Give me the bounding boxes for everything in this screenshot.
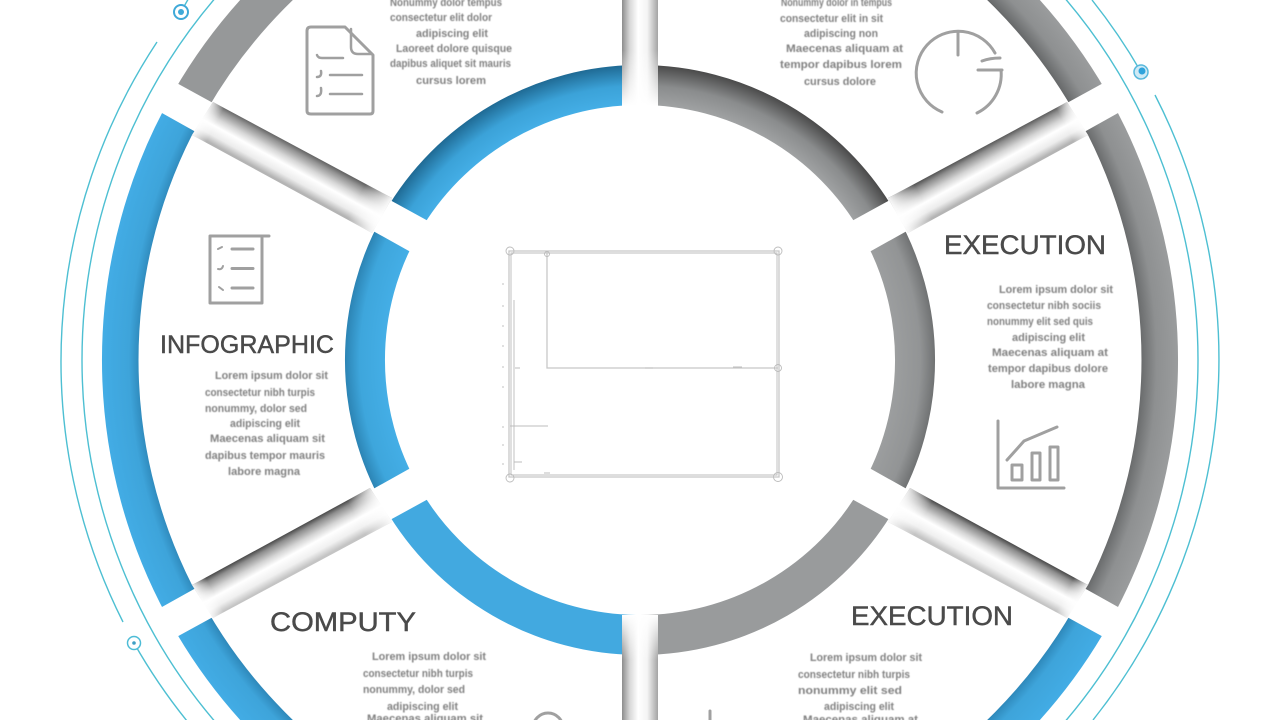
text block: adipiscing elit <box>230 418 300 430</box>
text block: adipiscing elit <box>387 701 458 713</box>
text block: adipiscing non <box>804 28 878 40</box>
inner segment: bottom-right gray <box>640 498 878 635</box>
spoke: bottom-right <box>840 460 1136 645</box>
text block: Laoreet dolore quisque <box>396 43 512 55</box>
segment: top-right gray <box>640 0 1090 100</box>
text block: consectetur elit in sit <box>780 13 883 25</box>
text block: Lorem ipsum dolor sit <box>215 370 328 382</box>
text block: cursus dolore <box>804 76 876 88</box>
heading: EXECUTION <box>851 601 1013 631</box>
text block <box>205 370 328 478</box>
text block: Lorem ipsum dolor sit <box>372 651 486 663</box>
text block: nonummy elit sed <box>798 685 902 697</box>
text block: Maecenas aliquam at <box>786 43 903 55</box>
text block: adipiscing elit <box>824 701 894 713</box>
inner segment: left blue <box>365 222 402 498</box>
segment: top-left gray <box>190 0 640 100</box>
text block: labore magna <box>1011 379 1086 391</box>
segment: bottom-left blue <box>190 620 640 720</box>
spoke: top-left <box>144 75 440 260</box>
panel: bottom-right EXECUTION <box>658 522 1067 720</box>
heading: EXECUTION <box>944 230 1106 260</box>
text block: tempor dapibus dolore <box>988 363 1108 375</box>
text block: cursus lorem <box>416 75 486 87</box>
panel: left INFOGRAPHIC <box>139 135 370 585</box>
spoke: top vertical <box>622 0 658 106</box>
inner segment: top-left blue <box>402 85 640 222</box>
text block: consectetur nibh turpis <box>205 387 315 399</box>
spoke: bottom vertical <box>622 615 658 720</box>
panel: top-left document <box>213 0 622 198</box>
text block: Maecenas aliquam sit <box>210 433 325 445</box>
node: bottom-left <box>128 636 140 650</box>
text block: adipiscing elit <box>1012 332 1085 344</box>
text block <box>798 652 922 720</box>
panel: top-right clock <box>658 0 1067 198</box>
segment: right gray <box>1090 100 1159 620</box>
node: top-left <box>174 5 188 19</box>
panel: right EXECUTION <box>910 135 1141 585</box>
panel: bottom-left COMPUTY <box>213 522 622 720</box>
text block: labore magna <box>228 466 301 478</box>
text block: nonummy elit sed quis <box>987 316 1093 328</box>
inner segment: bottom-left blue <box>402 498 640 635</box>
icon: magnifier (cropped) <box>533 713 563 720</box>
segment: bottom-right blue <box>640 620 1090 720</box>
text block <box>390 0 512 87</box>
text block: consectetur elit dolor <box>390 12 493 24</box>
spoke: bottom-left <box>144 460 440 645</box>
spoke: top-right <box>840 75 1136 260</box>
text block: Maecenas aliquam at <box>992 347 1108 359</box>
icon: bar chart <box>998 421 1064 488</box>
text block: Lorem ipsum dolor sit <box>999 284 1113 296</box>
inner segment: right gray <box>878 222 915 498</box>
text block: consectetur nibh turpis <box>798 669 910 681</box>
text block <box>780 0 903 88</box>
text block: consectetur nibh turpis <box>363 668 473 680</box>
text block: adipiscing elit <box>416 28 488 40</box>
text block <box>363 651 486 720</box>
inner ring: colored segments <box>365 85 915 635</box>
icon: checklist <box>210 236 269 303</box>
text block: dapibus tempor mauris <box>205 450 325 462</box>
center diagram: wireframe rectangle <box>503 247 782 482</box>
icon: document <box>307 27 373 114</box>
segment: left blue <box>121 100 190 620</box>
heading: INFOGRAPHIC <box>160 331 334 359</box>
icon: clock <box>916 31 1002 113</box>
text block <box>987 284 1113 391</box>
text block: nonummy, dolor sed <box>205 403 307 415</box>
inner segment: top-right gray <box>640 85 878 222</box>
node: top-right <box>1134 65 1148 79</box>
text block: consectetur nibh sociis <box>987 300 1101 312</box>
text block: dapibus aliquet sit mauris <box>390 58 511 70</box>
text block: tempor dapibus lorem <box>780 59 902 71</box>
text block: nonummy, dolor sed <box>363 684 465 696</box>
heading: COMPUTY <box>270 607 416 637</box>
text block: Lorem ipsum dolor sit <box>810 652 922 664</box>
icon: chart axis (cropped) <box>708 711 712 720</box>
